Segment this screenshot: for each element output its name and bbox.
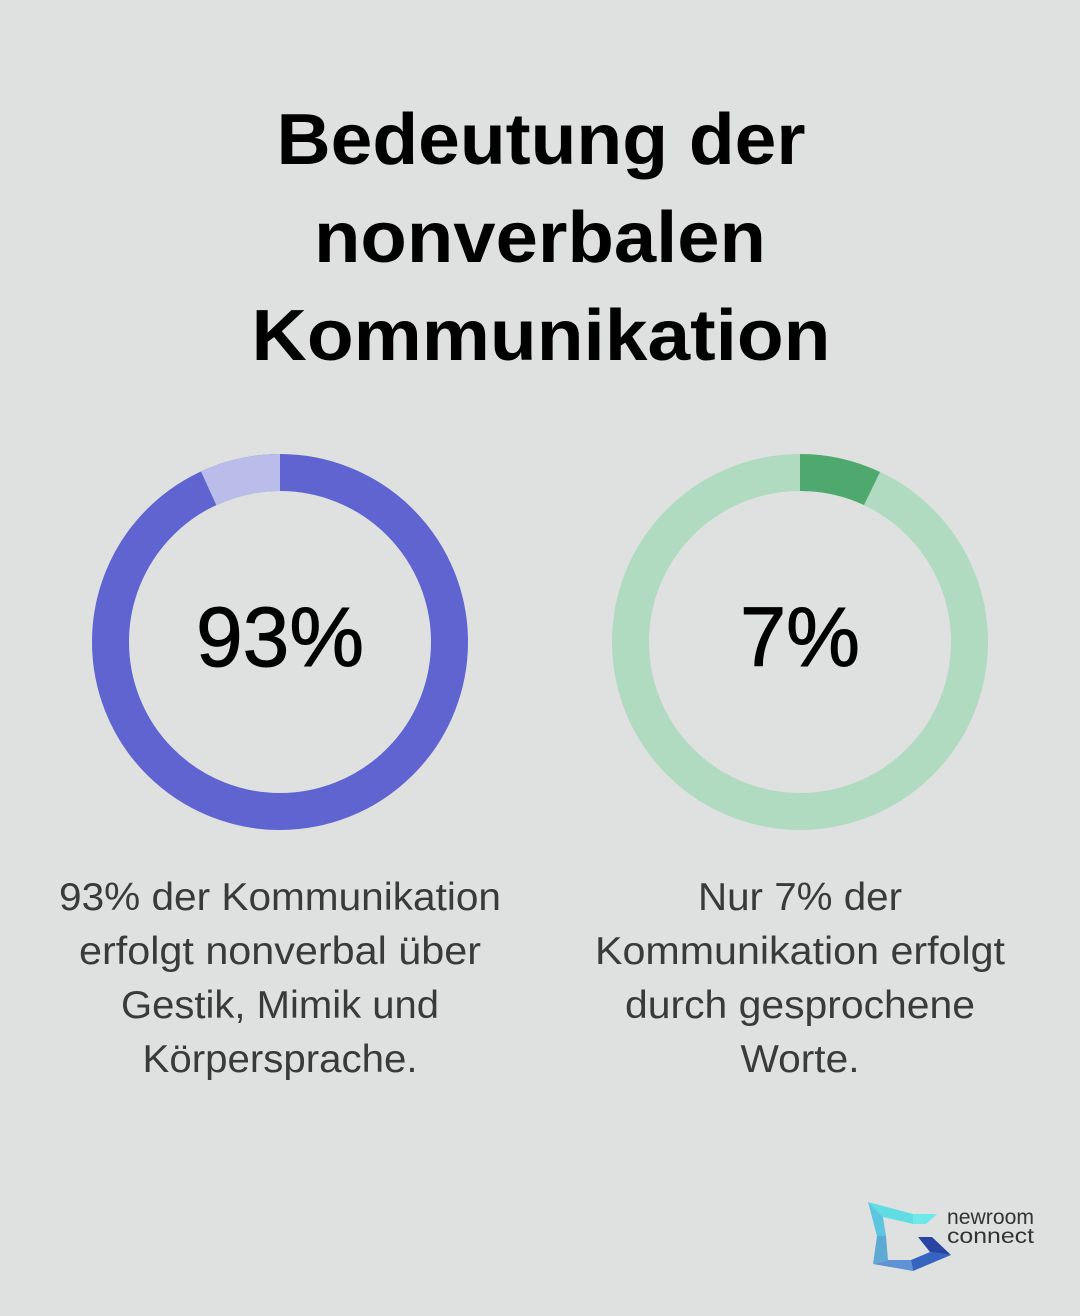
text block: 93% description xyxy=(59,876,501,1081)
text block: 93% description: erfolgt nonverbal über xyxy=(79,930,481,973)
value: 93%: 93% xyxy=(196,590,364,684)
title: nonverbalen xyxy=(314,198,766,278)
text block: 7% description xyxy=(595,876,1005,1081)
title xyxy=(252,100,830,376)
logo: newroom connect xyxy=(868,1202,1034,1271)
donut chart: 7% xyxy=(630,454,970,812)
text block: 7% description: durch gesprochene xyxy=(625,984,975,1027)
text block: 7% description: Kommunikation erfolgt xyxy=(595,930,1005,973)
text block: 7% description: Worte. xyxy=(740,1038,860,1081)
value: 7%: 7% xyxy=(740,590,860,684)
logo wordmark xyxy=(947,1206,1034,1248)
title: Bedeutung der xyxy=(276,100,806,180)
text block: 7% description: Nur 7% der xyxy=(698,876,902,919)
text block: 93% description: Gestik, Mimik und xyxy=(121,984,439,1027)
title: Kommunikation xyxy=(252,296,830,376)
logo wordmark: connect xyxy=(947,1225,1034,1248)
donut chart: 93% xyxy=(110,454,450,812)
logo wordmark: newroom xyxy=(947,1206,1034,1229)
text block: 93% description: 93% der Kommunikation xyxy=(59,876,501,919)
icon: logo mark xyxy=(868,1202,951,1271)
text block: 93% description: Körpersprache. xyxy=(142,1038,418,1081)
